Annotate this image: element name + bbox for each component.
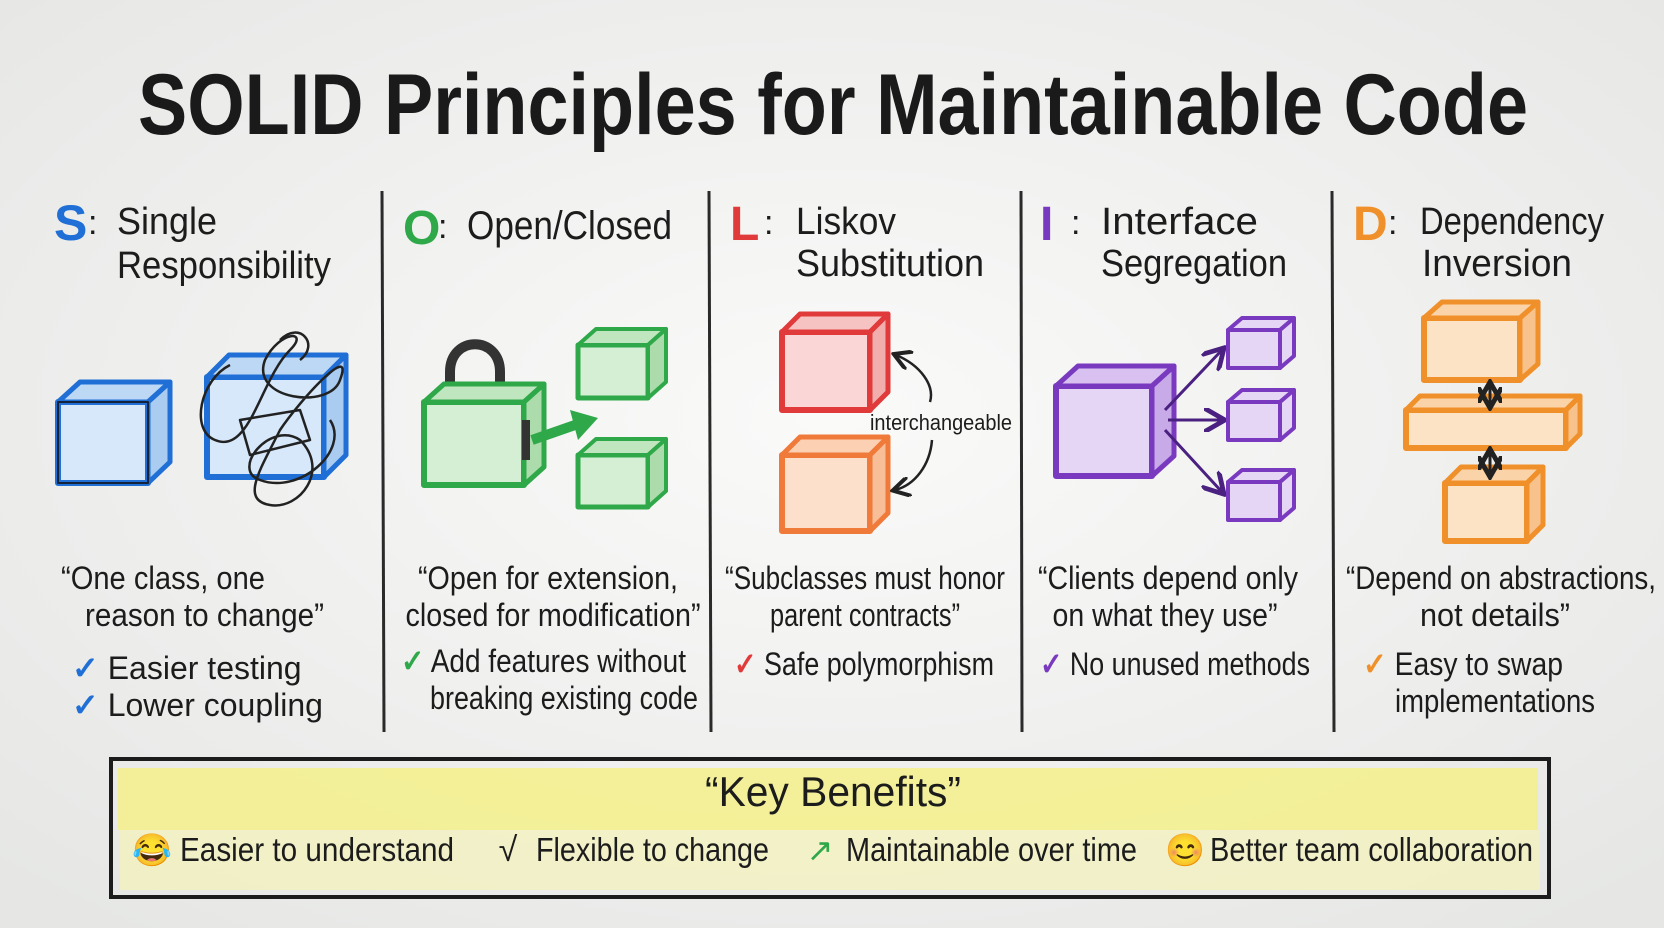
- heading: D: Dependency: [1420, 201, 1604, 243]
- heading: D: D: [1353, 198, 1388, 251]
- benefit items: ↗: [807, 832, 833, 868]
- heading: D: [1353, 198, 1604, 285]
- heading: O: O: [403, 202, 440, 255]
- quote: S: “One class, one: [61, 560, 265, 596]
- benefit items: 😂: [132, 832, 172, 868]
- heading: S: S: [54, 195, 87, 251]
- icon: single cube and tangled cube: [58, 333, 346, 505]
- icon: lock cube with extension cubes: [424, 329, 666, 507]
- icon: abstraction layer between cubes: [1406, 302, 1580, 541]
- quote: S: [61, 560, 324, 633]
- quote: I: [1038, 560, 1298, 633]
- heading: L: [730, 198, 984, 285]
- heading: L: Liskov: [796, 201, 896, 243]
- icon: interchangeable cubes: interchangeable: [870, 410, 1012, 435]
- checks: O: ✓ Add features without: [401, 643, 686, 679]
- heading: O: Open/Closed: [467, 204, 672, 248]
- checks: S: [72, 650, 323, 723]
- benefit items: Maintainable over time: [846, 831, 1137, 868]
- heading: S: Responsibility: [117, 245, 331, 287]
- checks: S: ✓ Lower coupling: [72, 687, 323, 723]
- quote: S: reason to change”: [85, 597, 324, 633]
- quote: D: [1346, 560, 1656, 633]
- benefit items: √: [499, 831, 518, 869]
- quote: D: not details”: [1420, 597, 1570, 633]
- heading: S: [54, 195, 331, 287]
- checks: D: [1363, 646, 1595, 719]
- checks: S: ✓ Easier testing: [72, 650, 302, 686]
- heading: O: [403, 202, 672, 255]
- heading: I: Segregation: [1101, 243, 1287, 285]
- heading: O: :: [438, 208, 447, 246]
- heading: I: :: [1071, 204, 1080, 242]
- quote: O: [406, 560, 700, 633]
- quote: I: on what they use”: [1052, 597, 1278, 633]
- heading: D: :: [1388, 204, 1397, 242]
- quote: I: “Clients depend only: [1038, 560, 1298, 596]
- heading: L: Substitution: [796, 243, 984, 285]
- quote: O: “Open for extension,: [418, 560, 678, 596]
- checks: O: [401, 643, 698, 716]
- heading: D: Inversion: [1422, 243, 1572, 285]
- benefit items: Better team collaboration: [1210, 831, 1533, 868]
- panel: L: [725, 198, 1012, 682]
- panel: D: [1346, 198, 1656, 719]
- quote: L: “Subclasses must honor: [725, 560, 1005, 596]
- icon: interface cube with client cubes: [1056, 318, 1294, 520]
- quote: L: parent contracts”: [770, 597, 960, 633]
- quote: O: closed for modification”: [406, 597, 700, 633]
- panel: S: [54, 195, 346, 723]
- benefit items: 😊: [1165, 832, 1205, 868]
- panel: O: [401, 202, 700, 716]
- checks: L: ✓ Safe polymorphism: [734, 646, 994, 682]
- benefit items: Easier to understand: [180, 831, 454, 868]
- panel: I: [1038, 198, 1310, 682]
- icon: interchangeable cubes: [782, 314, 1012, 531]
- heading: L: L: [730, 198, 759, 251]
- heading: L: :: [764, 204, 773, 242]
- quote: L: [725, 560, 1005, 633]
- panel: key benefits: [111, 759, 1549, 897]
- heading: S: :: [88, 204, 97, 242]
- heading: I: I: [1040, 198, 1053, 251]
- checks: I: ✓ No unused methods: [1040, 646, 1310, 682]
- checks: D: implementations: [1395, 683, 1595, 719]
- checks: D: ✓ Easy to swap: [1363, 646, 1563, 682]
- heading: I: Interface: [1101, 201, 1258, 243]
- heading: S: Single: [117, 201, 217, 243]
- checks: O: breaking existing code: [430, 680, 698, 716]
- heading: key benefits: “Key Benefits”: [705, 768, 961, 815]
- heading: I: [1040, 198, 1287, 285]
- benefit items: [132, 831, 1533, 869]
- benefit items: Flexible to change: [536, 831, 769, 868]
